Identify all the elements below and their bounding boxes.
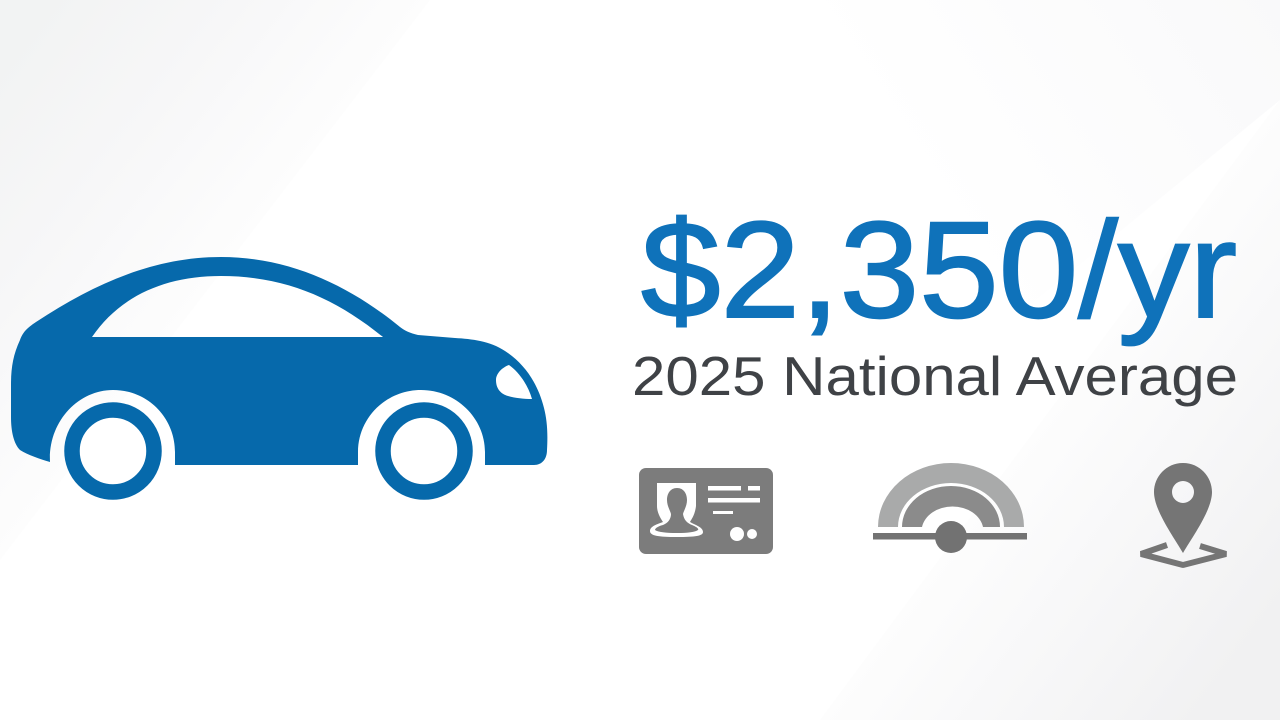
inner gauge band: [902, 486, 1000, 527]
map base: [1141, 545, 1226, 565]
subtitle: 2025 National Average: [632, 345, 1238, 407]
price heading: $2,350/yr: [641, 194, 1237, 347]
icon: driver license card: [639, 468, 773, 554]
card base: [639, 468, 773, 554]
icon: blue car: [11, 257, 547, 492]
gauge needle hub: [935, 521, 967, 553]
card dots: [730, 527, 744, 541]
car body: [11, 257, 547, 465]
portrait silhouette: [655, 488, 698, 533]
rear wheel: [72, 410, 154, 492]
card detail lines: [708, 486, 760, 514]
icon: location pin: [1141, 463, 1226, 565]
gauge baseline: [873, 533, 1027, 540]
portrait frame: [650, 483, 703, 537]
outer gauge band: [878, 463, 1024, 527]
pin head: [1154, 463, 1212, 553]
front wheel: [383, 410, 465, 492]
icon: credit score gauge: [873, 463, 1027, 553]
